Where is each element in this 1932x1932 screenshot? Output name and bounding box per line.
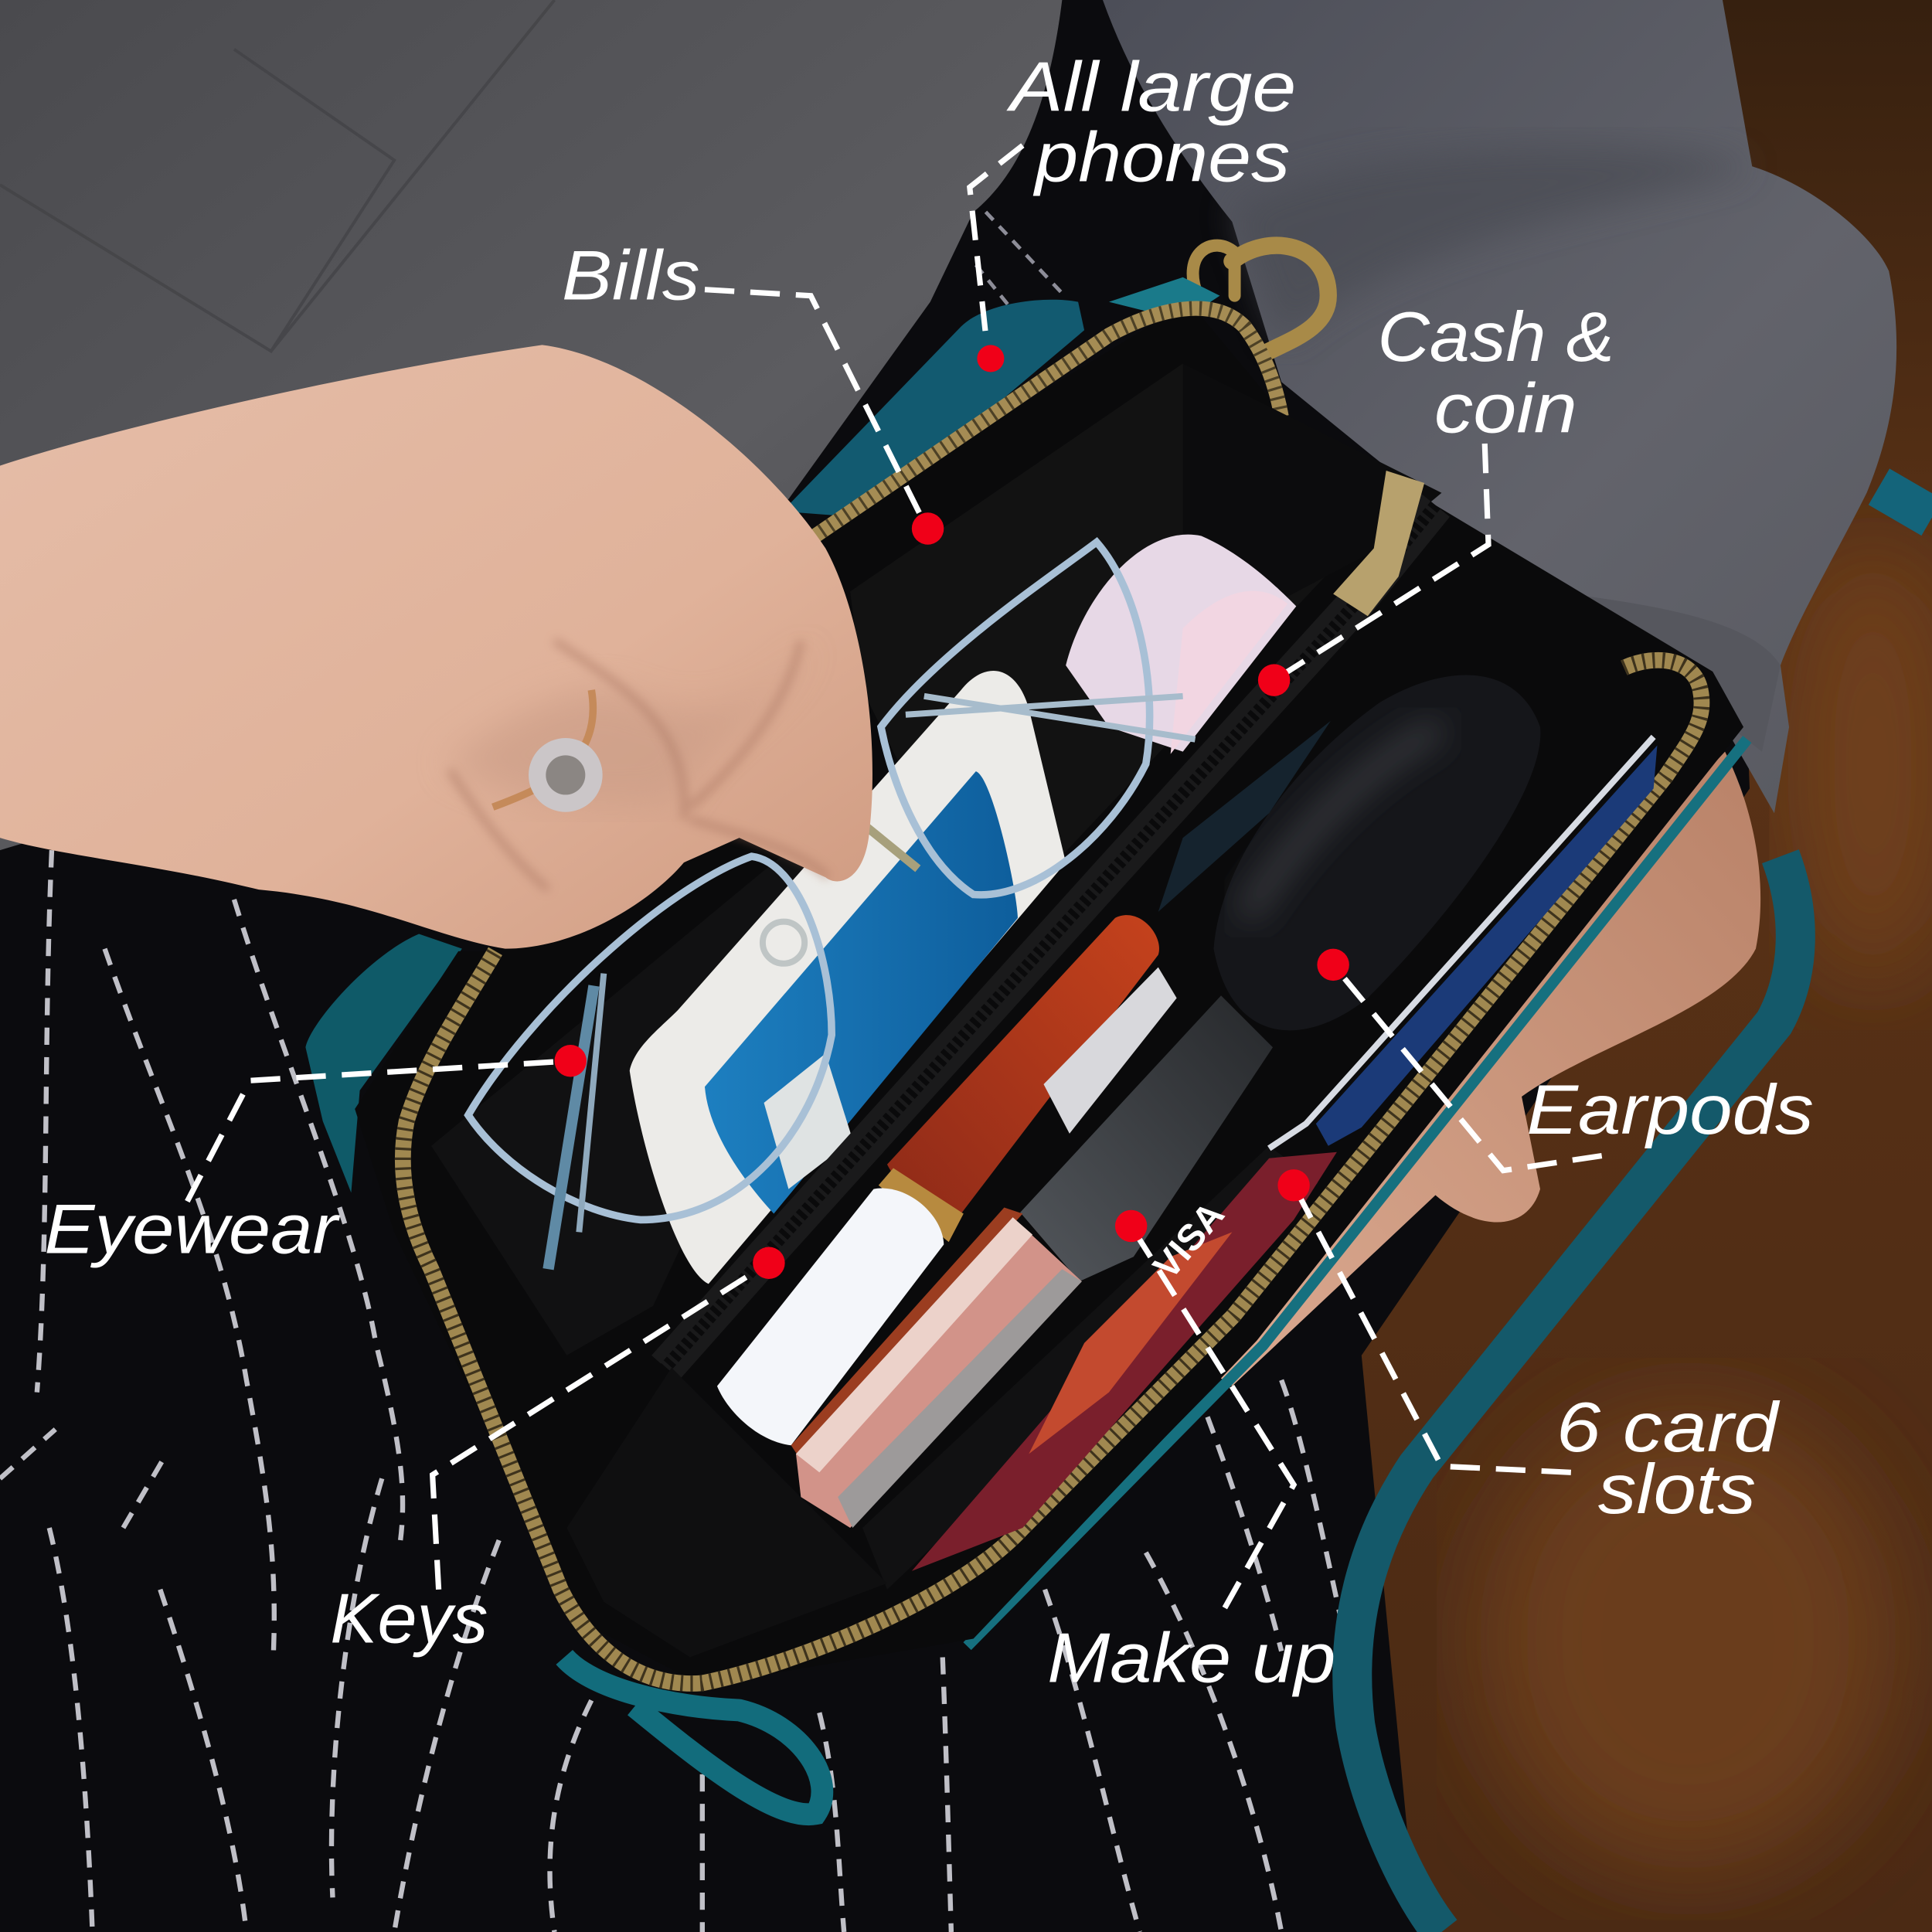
- callout: cash and coin: [1258, 298, 1614, 696]
- wallet: teal shell: [305, 277, 1747, 1685]
- right hand: [1171, 752, 1760, 1386]
- callout: six card slots: [1277, 1169, 1780, 1529]
- item: grey stick: [1020, 995, 1273, 1281]
- sleeve shadow folds: [1232, 147, 1781, 752]
- zipper: gold teeth: [403, 308, 1702, 1684]
- item: red lip gloss: [717, 915, 1159, 1445]
- callout: bills: Bills: [562, 236, 700, 315]
- lipstick: gold ring: [879, 1168, 964, 1242]
- background: grey shirt: [0, 0, 1062, 850]
- finger creases: [450, 641, 828, 889]
- left hand: [0, 345, 872, 949]
- clasp: gold hook: [1193, 246, 1328, 351]
- background: leather seat: [1362, 0, 1932, 1932]
- wallet bottom flap: [566, 1368, 887, 1657]
- callout: all large phones: phones: [1032, 118, 1290, 196]
- compartment: back wall: [850, 363, 1393, 937]
- hand knuckle shadow: [444, 641, 813, 805]
- strap: teal right: [1352, 856, 1795, 1932]
- trouser pinstripes: [0, 850, 1411, 1932]
- label: date sticker: [764, 1053, 852, 1189]
- ring: [493, 690, 603, 812]
- callout: keys: Keys: [330, 1580, 488, 1658]
- item: white soap bottle: [630, 671, 1066, 1284]
- lipstick: white tube: [717, 1189, 944, 1445]
- callout: six card slots: slots: [1598, 1451, 1756, 1529]
- callout: eyewear: [44, 1045, 587, 1268]
- callout: eyewear: Eyewear: [44, 1190, 341, 1268]
- callout: cash and coin: coin: [1434, 370, 1577, 448]
- callout: earpods: Earpods: [1526, 1071, 1814, 1149]
- callout: bills: [562, 236, 944, 545]
- callout: keys: [330, 1247, 785, 1658]
- callout: make up: [1047, 1210, 1335, 1697]
- item: white tube behind: [1043, 968, 1177, 1134]
- callout: all large phones: [970, 48, 1296, 372]
- compartment: inner lining: [1183, 363, 1441, 616]
- front card pocket panel: [862, 1146, 1318, 1590]
- zipper pull: [1333, 471, 1424, 616]
- callout: cash and coin: Cash &: [1378, 298, 1614, 376]
- item: blue label: [705, 771, 1018, 1213]
- teal wrist loop: [564, 1657, 822, 1815]
- strap: teal top-right stub: [1879, 487, 1932, 518]
- callout: six card slots: 6 card: [1556, 1389, 1780, 1467]
- background: grey sleeve: [1103, 0, 1896, 813]
- callout: make up: Make up: [1047, 1619, 1335, 1697]
- middle zipper divider: [665, 505, 1435, 1368]
- item: glasses: [468, 543, 1196, 1269]
- item: rose gloss tube: [791, 1207, 1082, 1528]
- wallet: black lining: [355, 302, 1743, 1685]
- callout: all large phones: All large: [1006, 48, 1296, 126]
- shirt seams: [0, 0, 554, 351]
- cards: red visa cards: VISA: [1145, 1195, 1233, 1287]
- callout: earpods: [1317, 949, 1814, 1171]
- cards: blue card: [1316, 746, 1657, 1146]
- dark stripe detail at top: [976, 212, 1062, 323]
- item: clear bottle dark: [1158, 721, 1331, 912]
- earpods case: [1213, 675, 1540, 1030]
- item: pink jar: [1066, 535, 1296, 754]
- cards: red visa cards: [912, 1152, 1337, 1571]
